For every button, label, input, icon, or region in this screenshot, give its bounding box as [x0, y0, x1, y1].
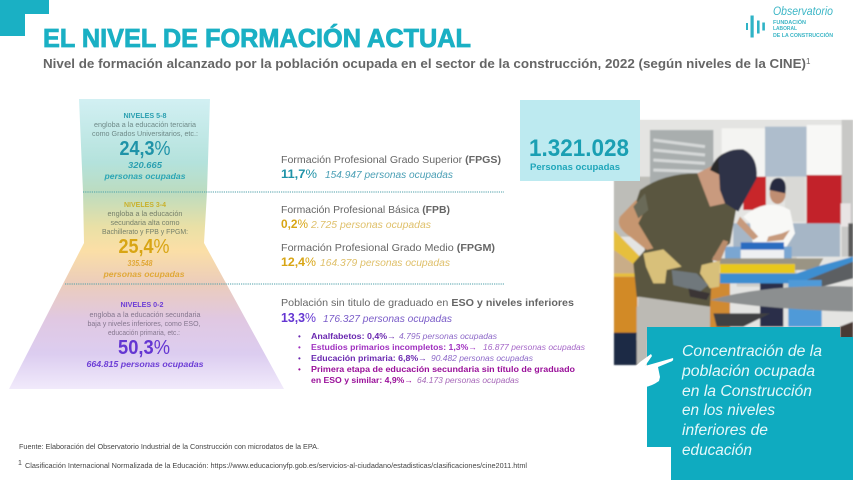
callout text: inferiores de: [682, 422, 768, 439]
title: EL NIVEL DE FORMACIÓN ACTUAL: [43, 23, 471, 53]
callout text: [681, 343, 822, 459]
text block: FPB: Formación Profesional Básica (FPB): [281, 204, 450, 216]
bullet list: education breakdown: •: [298, 332, 301, 341]
level 0-2 block: 664.815 personas ocupadas: [86, 359, 204, 369]
bullet list: education breakdown: •: [298, 354, 301, 363]
level 0-2 block: [86, 300, 204, 369]
logo: Observatorio: DE LA CONSTRUCCIÓN: [773, 31, 833, 39]
callout text: población ocupada: [681, 363, 815, 380]
subtitle: 1: [806, 57, 811, 66]
level 5-8 block: personas ocupadas: [103, 171, 186, 181]
callout text: en la Construcción: [682, 383, 812, 400]
bullet list: education breakdown: 16.877 personas ocupadas: [483, 343, 585, 352]
level 3-4 block: 25,4%: [118, 236, 170, 258]
level 0-2 block: 50,3%: [118, 337, 170, 359]
text block: sin titulo ESO: 13,3%: [281, 310, 316, 325]
bullet list: education breakdown: Estudios primarios incompletos: 1,3%→: [311, 343, 477, 352]
footnote: 1: [18, 460, 22, 467]
text block: FPB: [281, 204, 450, 231]
level 5-8 block: NIVELES 5-8: [124, 111, 166, 120]
text block: FPGS: 154.947 personas ocupadas: [325, 170, 453, 181]
text block: FPGS: 11,7%: [281, 167, 317, 181]
text block: FPB: 0,2%: [281, 217, 308, 231]
bullet list: education breakdown: [298, 332, 585, 385]
level 0-2 block: engloba a la educación secundaria: [90, 312, 201, 319]
level 3-4 block: 335.548: [128, 258, 153, 268]
bullet list: education breakdown: 90.482 personas ocupadas: [431, 354, 533, 363]
level 0-2 block: NIVELES 0-2: [120, 300, 164, 309]
text block: FPGM: [281, 242, 495, 269]
footnote: Clasificación Internacional Normalizada de la Educación: https://www.educacionyfp.gob.es/servicios-al-ciudadano/estadisticas/clasificaciones/cine2011.html: [25, 463, 527, 470]
level 3-4 block: [102, 200, 188, 279]
bullet list: education breakdown: •: [298, 365, 301, 374]
text block: FPB: 2.725 personas ocupadas: [310, 220, 431, 231]
level 5-8 block: engloba a la educación terciaria: [94, 122, 196, 129]
logo: Observatorio: LABORAL: [773, 26, 797, 32]
footnote: [18, 460, 527, 470]
text block: FPGM: 164.379 personas ocupadas: [320, 258, 450, 269]
level 0-2 block: educación primaria, etc.:: [108, 330, 180, 337]
bullet list: education breakdown: Educación primaria: 6,8%→: [311, 354, 427, 363]
logo: Observatorio: [746, 4, 833, 39]
bullet list: education breakdown: 4.795 personas ocupadas: [399, 332, 497, 341]
callout: personas ocupadas total: [520, 100, 640, 181]
callout text: Concentración de la: [682, 343, 822, 360]
text block: sin titulo ESO: [281, 297, 574, 325]
bullet list: education breakdown: en ESO y similar: 4,9%→: [311, 376, 413, 385]
funnel panel: training levels: [9, 99, 284, 389]
level 3-4 block: NIVELES 3-4: [124, 200, 167, 209]
text block: FPGM: Formación Profesional Grado Medio (FPGM): [281, 242, 495, 254]
level 5-8 block: [92, 111, 198, 181]
icon: pointing hand: [628, 354, 673, 389]
text block: FPGS: [281, 154, 501, 181]
callout: personas ocupadas total: 1.321.028: [529, 135, 629, 162]
text block: FPGM: 12,4%: [281, 255, 316, 269]
callout: concentración: [628, 327, 853, 480]
corner decoration: [0, 0, 49, 36]
level 5-8 block: 24,3%: [120, 138, 171, 160]
bullet list: education breakdown: 64.173 personas ocupadas: [417, 376, 519, 385]
callout text: educación: [682, 442, 752, 459]
bullet list: education breakdown: Primera etapa de educación secundaria sin título de graduado: [311, 365, 575, 374]
level 0-2 block: baja y niveles inferiores, como ESO,: [88, 321, 201, 328]
photo: construction workers: [614, 120, 853, 365]
level 5-8 block: 320.665: [128, 160, 162, 170]
level 3-4 block: personas ocupadas: [102, 269, 185, 279]
text block: sin titulo ESO: Población sin titulo de graduado en ESO y niveles inferiores: [281, 297, 574, 309]
funnel shape: [9, 99, 284, 389]
level 3-4 block: Bachillerato y FPB y FPGM:: [102, 229, 188, 236]
text block: sin titulo ESO: 176.327 personas ocupadas: [323, 314, 452, 325]
level 5-8 block: como Grados Universitarios, etc.:: [92, 131, 198, 138]
logo: Observatorio: Observatorio: [773, 4, 833, 18]
callout: personas ocupadas total: Personas ocupadas: [530, 162, 620, 172]
bullet list: education breakdown: Analfabetos: 0,4%→: [311, 332, 396, 341]
logo: Observatorio: FUNDACIÓN: [773, 18, 806, 26]
bullet list: education breakdown: •: [298, 343, 301, 352]
level 3-4 block: engloba a la educación: [108, 211, 183, 218]
source note: Fuente: Elaboración del Observatorio Industrial de la Construcción con microdatos de la EPA.: [19, 444, 319, 451]
subtitle: Nivel de formación alcanzado por la población ocupada en el sector de la construcción, 2022 (según niveles de la CINE): [43, 57, 806, 71]
level 3-4 block: secundaria alta como: [110, 220, 180, 227]
callout text: en los niveles: [682, 402, 775, 419]
text block: FPGS: Formación Profesional Grado Superior (FPGS): [281, 154, 501, 166]
